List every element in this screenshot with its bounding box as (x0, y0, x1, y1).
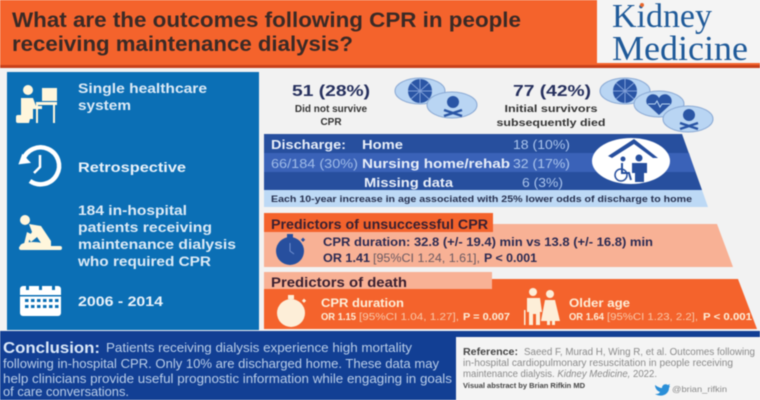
stat: did not survive CPR: CPR (320, 117, 342, 128)
text: retrospective: Retrospective (78, 160, 187, 175)
stat: initial survivors subsequently died: Initial survivors (504, 104, 598, 115)
icon: blue stopwatch (276, 234, 305, 265)
text: CPR duration comparison: P < 0.001 (484, 251, 537, 265)
icon: calendar (20, 282, 61, 316)
panel: conclusion (0, 331, 760, 400)
stat: initial survivors subsequently died: subsequently died (496, 118, 606, 129)
panel: predictors of unsuccessful CPR (264, 213, 733, 267)
text: older age predictor (569, 296, 752, 323)
icon: person at computer (16, 85, 57, 123)
text: discharge counts (513, 138, 570, 190)
text: older age predictor: OR 1.64 (569, 312, 604, 323)
icon: older couple (524, 288, 560, 325)
text: discharge total: 66/184 (30%) (271, 157, 358, 171)
text: discharge destinations: Nursing home/rehab (362, 157, 510, 171)
journal logo (597, 0, 760, 68)
text: older age predictor: P < 0.001 (703, 312, 752, 323)
panel: reference (456, 337, 760, 400)
text: CPR duration predictor (321, 296, 510, 323)
callout: age and discharge odds (264, 190, 708, 207)
text: citation: maintenance dialysis. Kidney Medicine, 2022. (463, 369, 657, 380)
icon: cream stopwatch (277, 295, 306, 327)
text: conclusion: Patients receiving dialysis experience high mortality (106, 341, 413, 355)
text: older age predictor: [95%CI 1.23, 2.2], (607, 312, 698, 323)
text: CPR duration comparison: OR 1.41 (323, 251, 370, 265)
icon: retrospective clock (15, 147, 59, 184)
text: discharge counts: 32 (17%) (513, 157, 570, 171)
text: discharge counts: 18 (10%) (513, 138, 570, 152)
text: conclusion: of care conversations. (3, 385, 129, 399)
text: CPR duration predictor: CPR duration (321, 296, 404, 310)
text: conclusion: Conclusion: (3, 340, 100, 357)
stat: did not survive CPR: Did not survive (295, 104, 368, 115)
text: single healthcare system: Single healthcare (78, 81, 208, 96)
heading: predictors of death (264, 272, 492, 290)
icon: twitter bird (655, 384, 670, 396)
text: citation: Saeed F, Murad H, Wing R, et al. Outcomes following (524, 347, 755, 358)
heading: predictors of unsuccessful CPR: Predictors of unsuccessful CPR (271, 217, 488, 232)
panel: predictors of death (264, 272, 757, 329)
title: What are the outcomes following CPR in people (12, 9, 521, 32)
text: study years: 2006 - 2014 (78, 294, 164, 309)
text: twitter handle: @brian_rifkin (672, 384, 727, 394)
icon: person performing CPR (19, 215, 62, 250)
title (12, 9, 521, 56)
stat: initial survivors subsequently died: 77 (42%) (513, 83, 591, 100)
text: visual abstract credit: Visual abstract by Brian Rifkin MD (463, 381, 586, 390)
text: citation: in-hospital cardiopulmonary resuscitation in people receiving (463, 358, 733, 369)
header banner (0, 0, 760, 68)
panel: study design (7, 72, 259, 330)
journal logo: Medicine (612, 29, 748, 68)
stat: initial survivors subsequently died (496, 83, 606, 129)
callout: age and discharge odds: Each 10-year increase in age associated with 25% lower odds of discharge to home (271, 194, 692, 205)
icon group: causes of death, first outcome (395, 78, 477, 118)
text: patient count: 184 in-hospital (78, 203, 187, 218)
text: CPR duration predictor: OR 1.15 (321, 312, 356, 323)
stat: did not survive CPR (292, 83, 370, 128)
text: discharge destinations: Home (362, 138, 403, 152)
text: conclusion: help clinicians provide useful prognostic information while engaging in goals (3, 372, 452, 386)
text: conclusion (3, 340, 452, 399)
heading: predictors of death: Predictors of death (271, 275, 407, 290)
panel: discharge (264, 134, 702, 190)
icon group: causes of death, second outcome (600, 78, 713, 132)
text: discharge total (271, 138, 358, 171)
text: CPR duration predictor: [95%CI 1.04, 1.27], (359, 312, 459, 323)
text: discharge total: Discharge: (271, 138, 346, 152)
text: patient count: patients receiving (78, 220, 212, 235)
text: discharge destinations (362, 138, 510, 190)
text: patient count: maintenance dialysis (78, 237, 236, 252)
stat: did not survive CPR: 51 (28%) (292, 83, 370, 100)
text: single healthcare system: system (78, 98, 131, 113)
text: patient count (77, 203, 236, 269)
icon: home and wheelchair (592, 138, 670, 184)
text: CPR duration comparison: CPR duration: 32.8 (+/- 19.4) min vs 13.8 (+/- 16.8) min (323, 235, 653, 249)
text: citation (463, 347, 755, 380)
text: single healthcare system (78, 81, 208, 113)
text: discharge counts: 6 (3%) (522, 176, 563, 190)
text: conclusion: following in-hospital CPR. Only 10% are discharged home. These data may (3, 357, 440, 371)
text: CPR duration predictor: P = 0.007 (463, 312, 510, 323)
text: CPR duration comparison (323, 235, 653, 265)
title: receiving maintenance dialysis? (12, 33, 353, 56)
text: citation: Reference: (463, 347, 518, 358)
text: CPR duration comparison: [95%CI 1.24, 1.61], (373, 251, 480, 265)
text: patient count: who required CPR (77, 254, 211, 269)
text: older age predictor: Older age (569, 296, 630, 310)
text: discharge destinations: Missing data (364, 176, 454, 190)
